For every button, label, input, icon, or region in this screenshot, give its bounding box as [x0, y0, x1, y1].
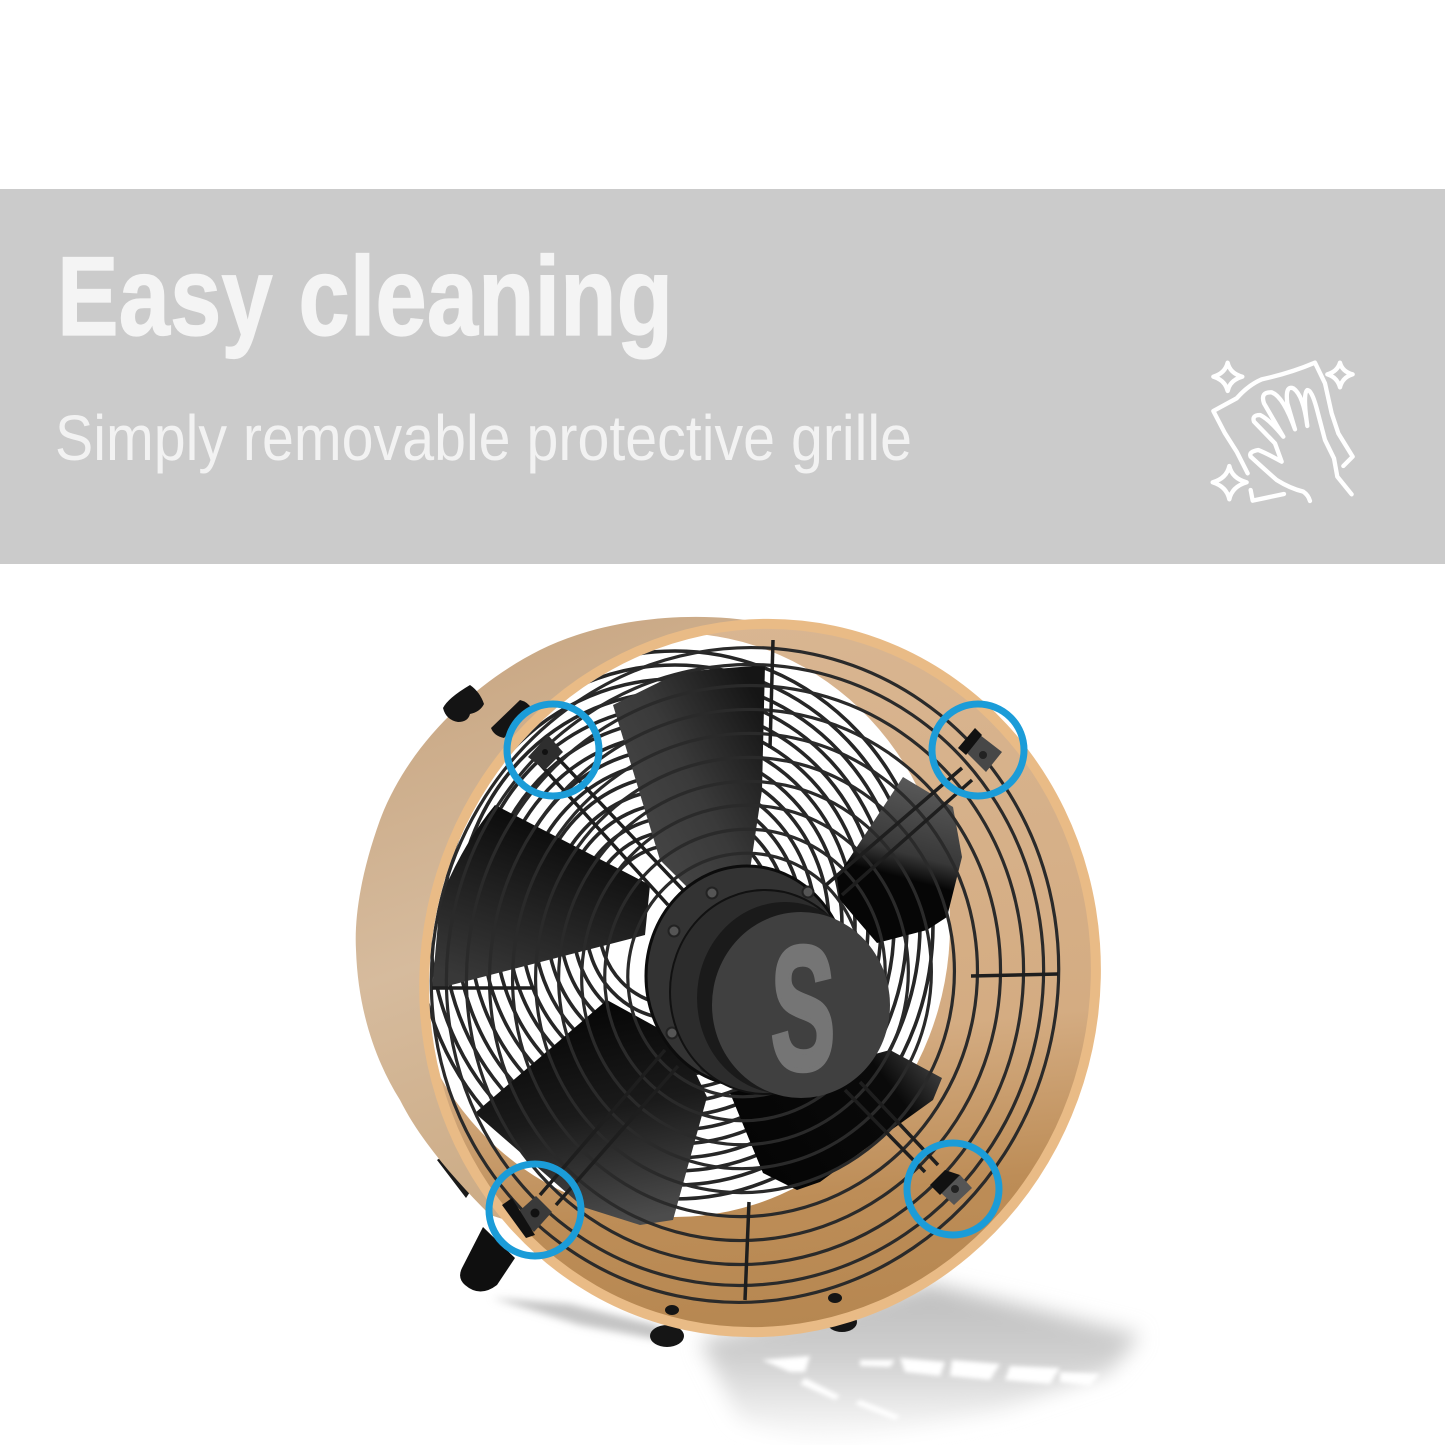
motor back plate	[646, 866, 848, 1086]
control knob 2	[491, 700, 531, 738]
blade lower right	[730, 1050, 942, 1190]
front rim	[353, 555, 1167, 1401]
mounting clip top right	[958, 728, 1002, 772]
cast shadow left strip	[492, 1298, 660, 1340]
highlight circles	[489, 704, 1024, 1256]
floor shadow	[492, 1284, 1140, 1445]
wood hole right	[828, 1293, 842, 1303]
wood hole left	[665, 1305, 679, 1315]
front grille rings	[430, 646, 1060, 1304]
brand letter S: S	[771, 910, 835, 1107]
grille struts	[432, 640, 1058, 1300]
rear opening and grille	[429, 635, 950, 1217]
blade left	[432, 805, 650, 990]
plate screws	[666, 886, 814, 1072]
circle bottom left	[489, 1164, 581, 1256]
circle top right	[932, 704, 1024, 796]
blade top	[613, 665, 765, 890]
blade right	[837, 777, 962, 943]
light patches	[762, 1356, 1100, 1420]
subtitle: Simply removable protective grille	[55, 402, 912, 474]
icon: hand wiping with cloth and sparkles	[1213, 363, 1353, 501]
motor cap	[712, 912, 890, 1098]
cast shadow right	[700, 1284, 1140, 1445]
foot left	[650, 1325, 684, 1347]
interior wood	[364, 567, 1156, 1389]
rear leg	[460, 1227, 515, 1292]
control knob 1	[443, 685, 484, 722]
motor shadow ring	[697, 902, 873, 1094]
wooden body	[356, 617, 900, 1300]
banner: easy cleaning	[0, 189, 1445, 564]
side knob lower	[437, 1156, 470, 1198]
fan	[356, 616, 1101, 1347]
mounting clip bottom left	[502, 1196, 552, 1238]
mounting clip bottom right	[930, 1170, 972, 1205]
rear grille rings	[417, 651, 933, 1199]
blade lower left	[475, 1000, 707, 1225]
motor housing	[670, 890, 860, 1094]
foot right	[827, 1312, 857, 1332]
title: Easy cleaning	[57, 234, 673, 359]
circle bottom right	[907, 1143, 999, 1235]
circle top left	[507, 704, 599, 796]
mounting clip top left	[528, 735, 563, 770]
